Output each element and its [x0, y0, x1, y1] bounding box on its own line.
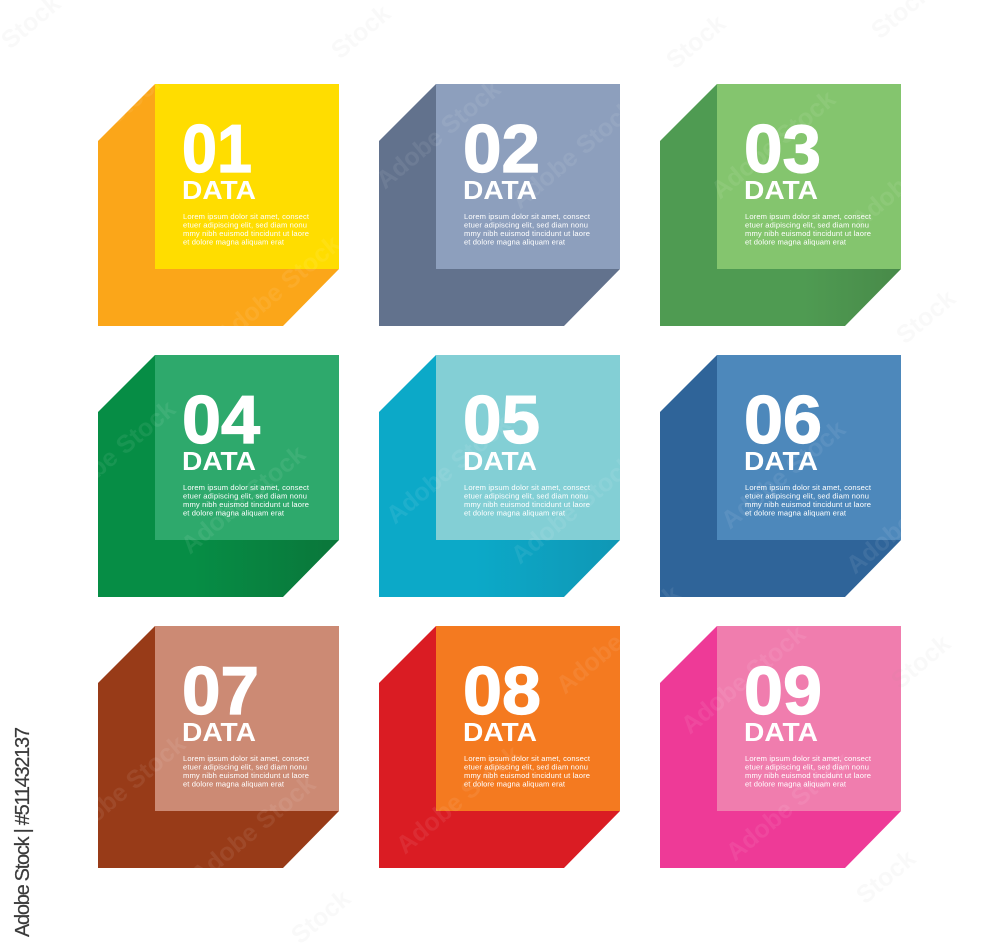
- card 05 body text: mmy nibh euismod tincidunt ut laore: [464, 500, 590, 509]
- card 03 body text: etuer adipiscing elit, sed diam nonu: [745, 220, 869, 230]
- card 04 body text: et dolore magna aliquam erat: [183, 508, 285, 518]
- card 09 side: [660, 626, 901, 868]
- card 06 body text: [745, 483, 872, 518]
- card 03 body text: [745, 212, 872, 246]
- card 07 body text: [183, 754, 310, 788]
- card 01 side: [98, 84, 339, 326]
- stock id label: Adobe Stock | #511432137: [12, 727, 34, 937]
- card 04 number: 04: [182, 382, 260, 458]
- card 04 body text: mmy nibh euismod tincidunt ut laore: [183, 500, 309, 509]
- card 02 body text: mmy nibh euismod tincidunt ut laore: [464, 229, 590, 238]
- card 08 number: 08: [463, 653, 541, 729]
- card 08 body text: mmy nibh euismod tincidunt ut laore: [464, 771, 590, 780]
- card 09 face: [717, 626, 901, 811]
- card 06 side: [660, 355, 901, 597]
- card 01 body text: et dolore magna aliquam erat: [183, 238, 285, 246]
- card 08: [379, 626, 620, 868]
- watermark text: Adobe Stock: [56, 730, 191, 850]
- watermark text: Adobe Stock: [186, 770, 321, 890]
- card 08 body text: et dolore magna aliquam erat: [464, 780, 566, 788]
- watermark text: Adobe Stock: [211, 230, 346, 350]
- card 06 body text: etuer adipiscing elit, sed diam nonu: [745, 492, 869, 500]
- card 09 number: 09: [744, 653, 822, 729]
- card 04 heading: DATA: [182, 446, 256, 476]
- watermark text: Adobe Stock: [176, 440, 311, 560]
- card 05 body text: etuer adipiscing elit, sed diam nonu: [464, 492, 588, 500]
- card 05 side: [379, 355, 620, 597]
- card 09 body text: Lorem ipsum dolor sit amet, consect: [745, 754, 872, 763]
- card 01 body text: mmy nibh euismod tincidunt ut laore: [183, 229, 309, 238]
- watermark text: Stock: [326, 0, 396, 65]
- card 01 body text: [183, 212, 310, 246]
- watermark text: Stock: [286, 884, 356, 950]
- card 02 body text: Lorem ipsum dolor sit amet, consect: [464, 212, 591, 221]
- card 07 heading: DATA: [182, 717, 256, 747]
- card 05 number: 05: [463, 382, 540, 458]
- card 02 side: [379, 84, 620, 326]
- watermark text: Adobe Stock: [506, 450, 641, 570]
- card 07 body text: Lorem ipsum dolor sit amet, consect: [183, 754, 310, 763]
- card 09 body text: [745, 754, 872, 788]
- card 05 body text: Lorem ipsum dolor sit amet, consect: [464, 483, 591, 492]
- card 06 face: [717, 355, 901, 540]
- card 01 heading: DATA: [182, 175, 256, 205]
- card 06 number: 06: [744, 382, 822, 458]
- watermark text: Adobe Stock: [716, 415, 851, 535]
- card 05 body text: et dolore magna aliquam erat: [464, 508, 566, 518]
- watermark text: Adobe Stock: [841, 460, 976, 580]
- card 01 body text: Lorem ipsum dolor sit amet, consect: [183, 212, 310, 221]
- card 06: [660, 355, 901, 597]
- card 01 number: 01: [182, 111, 252, 187]
- card 04 side: [98, 355, 339, 597]
- card 08 face: [436, 626, 620, 811]
- card 02 face: [436, 84, 620, 269]
- card 07 face: [155, 626, 339, 811]
- card 02 body text: [464, 212, 591, 246]
- watermark text: Stock: [886, 629, 956, 695]
- card 04: [98, 355, 339, 597]
- card 02 heading: DATA: [463, 175, 537, 205]
- card 03 number: 03: [744, 111, 821, 187]
- card 03: [660, 84, 901, 326]
- card 09 body text: mmy nibh euismod tincidunt ut laore: [745, 771, 871, 780]
- watermark text: Adobe Stock: [721, 747, 856, 867]
- card 09 heading: DATA: [744, 717, 818, 747]
- card 04 body text: [183, 483, 310, 518]
- card 02: [379, 84, 620, 326]
- card 01 body text: etuer adipiscing elit, sed diam nonu: [183, 220, 307, 230]
- watermark text: Adobe Stock: [371, 75, 506, 195]
- card 03 body text: mmy nibh euismod tincidunt ut laore: [745, 229, 871, 238]
- card 07 side: [98, 626, 339, 868]
- watermark text: Adobe Stock: [46, 395, 181, 515]
- card 08 body text: etuer adipiscing elit, sed diam nonu: [464, 762, 588, 772]
- card 03 body text: Lorem ipsum dolor sit amet, consect: [745, 212, 872, 221]
- card 01: [98, 84, 339, 326]
- card 03 face: [717, 84, 901, 269]
- card 08 heading: DATA: [463, 717, 537, 747]
- card 09 body text: et dolore magna aliquam erat: [745, 780, 847, 788]
- watermark text: Adobe Stock: [846, 115, 981, 235]
- card 02 number: 02: [463, 111, 540, 187]
- card 07 body text: etuer adipiscing elit, sed diam nonu: [183, 762, 307, 772]
- watermark text: Adobe Stock: [676, 620, 811, 740]
- card 02 body text: et dolore magna aliquam erat: [464, 238, 566, 246]
- watermark text: Adobe Stock: [391, 740, 526, 860]
- card 06 body text: Lorem ipsum dolor sit amet, consect: [745, 483, 872, 492]
- card 07 body text: et dolore magna aliquam erat: [183, 780, 285, 788]
- card 06 heading: DATA: [744, 446, 818, 476]
- card 08 body text: Lorem ipsum dolor sit amet, consect: [464, 754, 591, 763]
- watermark text: Adobe Stock: [36, 65, 171, 185]
- card 09: [660, 626, 901, 868]
- card 06 body text: et dolore magna aliquam erat: [745, 508, 847, 518]
- card 07: [98, 626, 339, 868]
- watermark text: Adobe Stock: [381, 410, 516, 530]
- card 04 body text: etuer adipiscing elit, sed diam nonu: [183, 492, 307, 500]
- card 04 face: [155, 355, 339, 540]
- card 05 body text: [464, 483, 591, 518]
- watermark text: Stock: [851, 844, 921, 910]
- card 03 heading: DATA: [744, 175, 818, 205]
- card 03 side: [660, 84, 901, 326]
- watermark text: Adobe Stock: [551, 580, 686, 700]
- card 07 number: 07: [182, 653, 259, 729]
- card 05 heading: DATA: [463, 446, 537, 476]
- card 02 body text: etuer adipiscing elit, sed diam nonu: [464, 220, 588, 230]
- card 09 body text: etuer adipiscing elit, sed diam nonu: [745, 762, 869, 772]
- card 08 body text: [464, 754, 591, 788]
- card 04 body text: Lorem ipsum dolor sit amet, consect: [183, 483, 310, 492]
- watermark text: Stock: [661, 9, 731, 75]
- watermark text: Adobe Stock: [506, 95, 641, 215]
- watermark text: Stock: [891, 284, 961, 350]
- card 03 body text: et dolore magna aliquam erat: [745, 238, 847, 246]
- watermark text: Adobe Stock: [706, 85, 841, 205]
- card 07 body text: mmy nibh euismod tincidunt ut laore: [183, 771, 309, 780]
- card 08 side: [379, 626, 620, 868]
- card 01 face: [155, 84, 339, 269]
- card 05 face: [436, 355, 620, 540]
- card 06 body text: mmy nibh euismod tincidunt ut laore: [745, 500, 871, 509]
- card 05: [379, 355, 620, 597]
